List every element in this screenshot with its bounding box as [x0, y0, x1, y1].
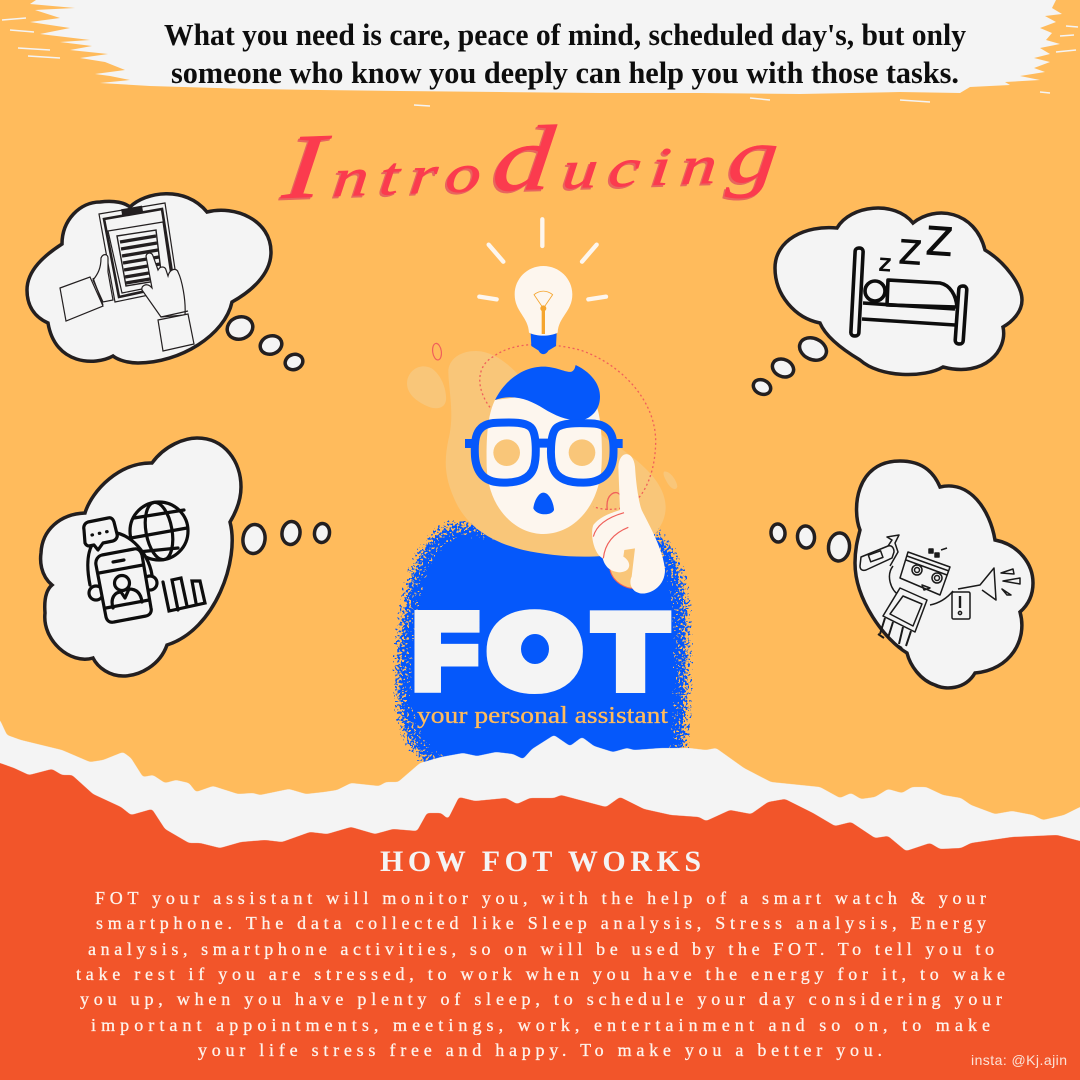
decorative blob behind the head — [446, 351, 666, 557]
thought cloud: document review — [27, 194, 305, 372]
wordmark: FOT: F — [413, 594, 478, 710]
character: bulb and person — [407, 219, 677, 594]
heading: top message: What you need is care, peace of mind, scheduled day's, but only — [164, 17, 966, 52]
tagline: your personal assistant — [417, 703, 668, 729]
title: Introducing: Introducing — [278, 99, 795, 219]
body text: smartphone. The data collected like Sleep analysis, Stress analysis, Energy — [96, 913, 986, 933]
body text: FOT your assistant will monitor you, with the help of a smart watch & your — [95, 888, 986, 908]
footer panel — [0, 758, 1080, 1080]
body text: your life stress free and happy. To make you a better you. — [198, 1040, 882, 1060]
heading: top message: someone who know you deeply can help you with those tasks. — [171, 55, 959, 90]
wordmark: FOT — [413, 593, 666, 710]
icon: sleeping letters: Z — [898, 232, 923, 273]
top brush banner — [2, 0, 1078, 106]
icon: robot with extinguisher and alarm — [860, 535, 1020, 648]
wordmark: FOT: O — [488, 593, 582, 710]
face — [487, 393, 602, 534]
title: Introducing: Introducing — [276, 101, 793, 221]
thought cloud: robot alarm — [770, 461, 1033, 688]
icon: light bulb — [515, 266, 572, 354]
wordmark: FOT: T — [595, 595, 666, 710]
icon: sleeping letters — [878, 219, 954, 277]
small blobs and red accents — [407, 343, 677, 489]
dotted orbit — [480, 344, 656, 509]
thought cloud: smartphone activity — [41, 438, 331, 676]
body text: analysis, smartphone activities, so on will be used by the FOT. To tell you to — [88, 939, 994, 959]
shirt — [397, 524, 688, 772]
hair — [495, 365, 600, 420]
body text: important appointments, meetings, work, entertainment and so on, to make — [91, 1015, 990, 1035]
heading: how FOT works: HOW FOT WORKS — [380, 845, 701, 878]
icon: phone, globe and chart — [84, 500, 205, 622]
body text: take rest if you are stressed, to work when you have the energy for it, to wake — [76, 964, 1005, 984]
credit: insta: @Kj.ajin — [971, 1052, 1067, 1068]
icon: person in bed — [851, 248, 967, 344]
glasses — [465, 423, 623, 483]
body text: you up, when you have plenty of sleep, to schedule your day considering your — [80, 989, 1002, 1009]
heading: top message — [164, 17, 966, 90]
mouth — [533, 493, 554, 514]
thought cloud: sleep — [751, 208, 1022, 397]
icon: sleeping letters: Z — [924, 219, 954, 266]
icon: bulb rays — [479, 219, 606, 299]
torn paper band — [0, 712, 1080, 870]
icon: sleeping letters: z — [878, 250, 892, 277]
icon: clipboard with hands — [60, 203, 194, 351]
body text — [76, 888, 1005, 1060]
hand pointing up — [592, 454, 665, 594]
